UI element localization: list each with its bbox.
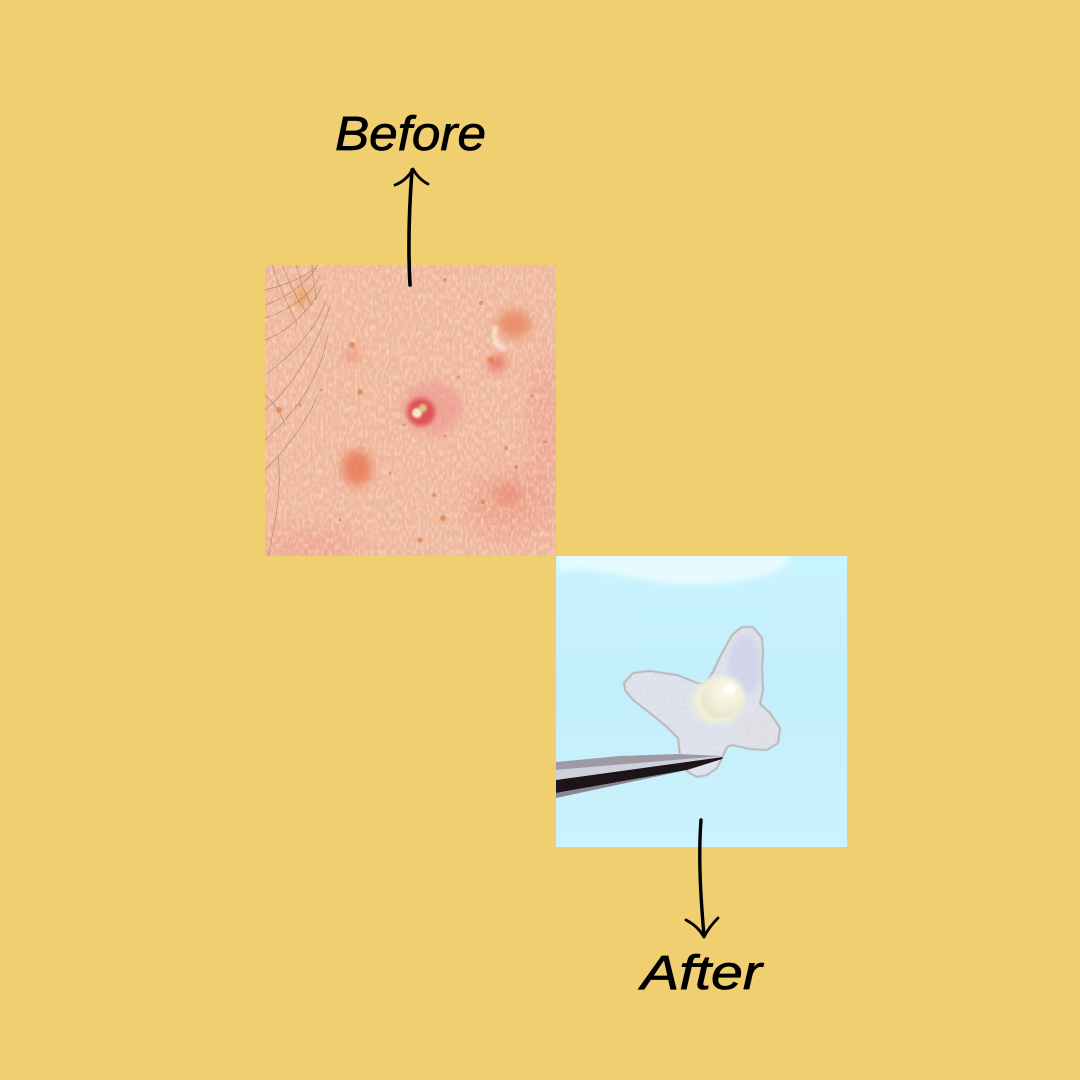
freckles [276,278,546,542]
arrow: up to Before [395,169,428,285]
hairs [265,265,330,556]
heading: Before: Before [335,108,486,161]
photo: butterfly patch held by tweezers, after [556,552,847,847]
heading: After: After [637,947,764,1000]
skin texture [265,265,556,556]
sky glow [556,552,790,584]
tweezers [556,754,723,798]
cream blob [692,675,746,724]
butterfly patch [620,622,785,782]
arrow: down to After [686,820,718,937]
photo: skin with acne, before [260,265,559,559]
